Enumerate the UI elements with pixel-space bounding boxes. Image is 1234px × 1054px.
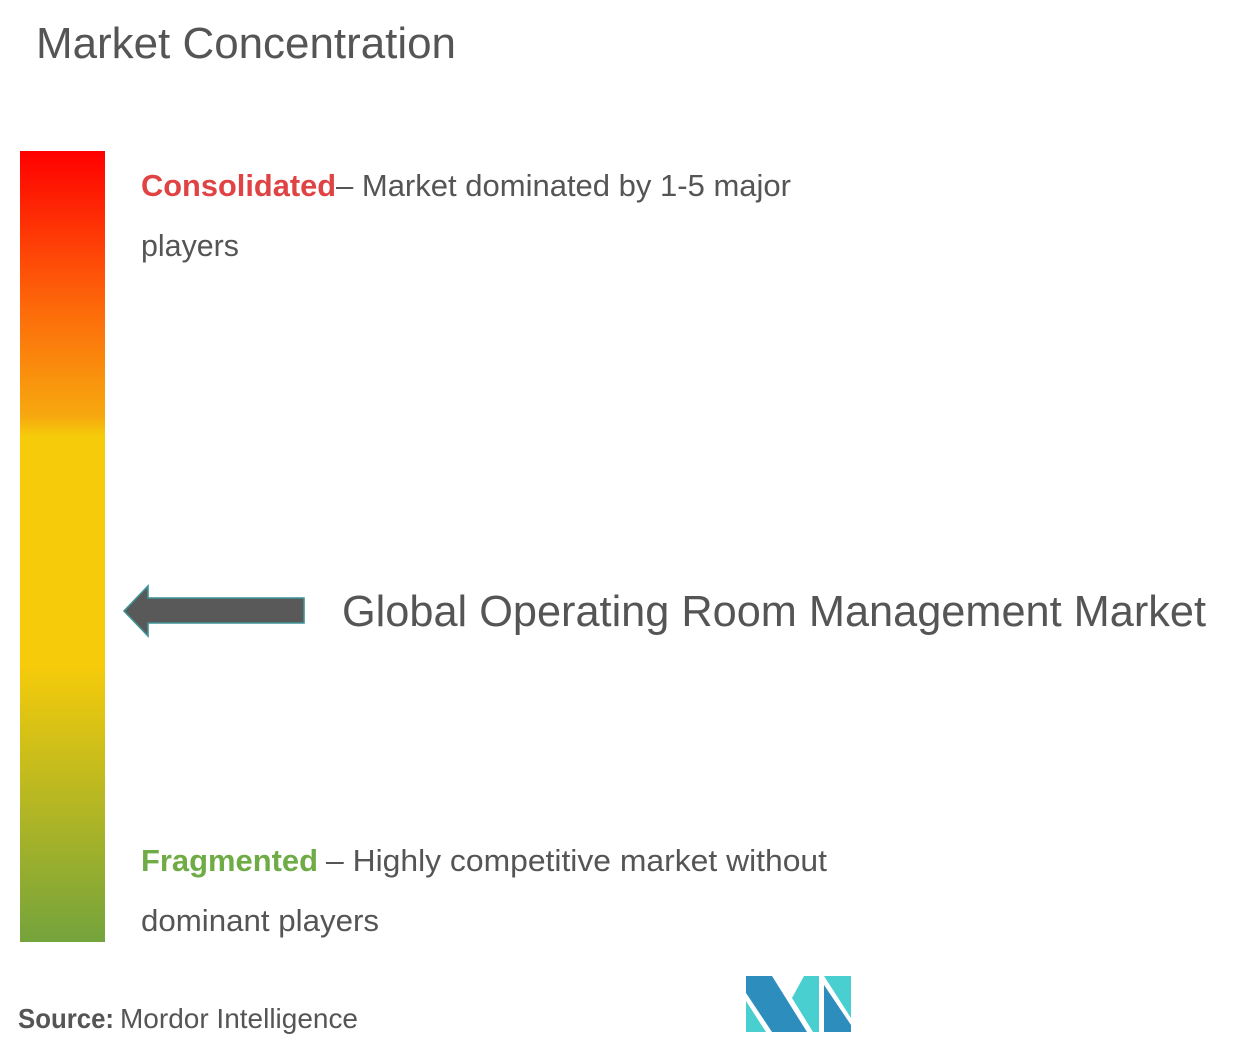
icon: Mordor Intelligence logo (746, 976, 851, 1032)
text block: consolidated: players (141, 228, 239, 263)
source line (18, 1003, 358, 1034)
arrow pointing to scale (124, 586, 304, 636)
text block: fragmented: dominant players (141, 903, 379, 938)
text block: consolidated: – Market dominated by 1-5 major (336, 168, 791, 203)
text block: consolidated: Consolidated (141, 168, 336, 203)
source line: Source: (18, 1003, 114, 1034)
text block: fragmented: – Highly competitive market without (326, 843, 827, 878)
market name label: Global Operating Room Management Market (342, 587, 1206, 636)
gradient scale bar (20, 151, 105, 942)
text block: fragmented: Fragmented (141, 843, 318, 878)
text block: consolidated (141, 168, 791, 263)
title: Market Concentration (36, 19, 456, 68)
source line: Mordor Intelligence (120, 1003, 358, 1034)
text block: fragmented (141, 843, 827, 938)
